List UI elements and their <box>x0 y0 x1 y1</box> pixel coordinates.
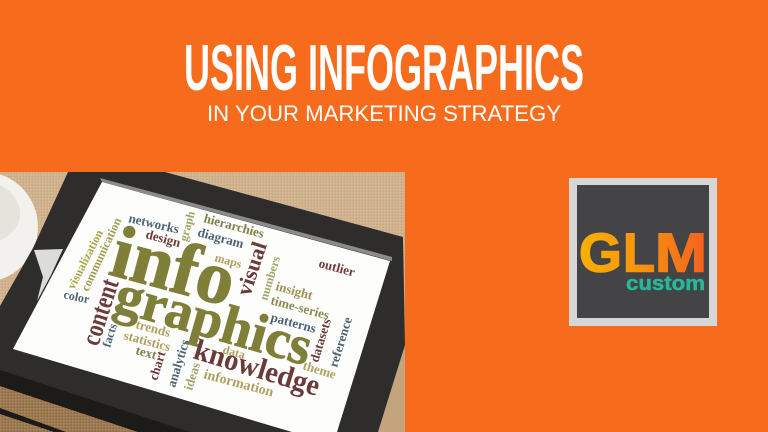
word: information: information <box>202 367 275 400</box>
word: time-series: time-series <box>269 292 331 322</box>
word: graph: graph <box>176 209 198 243</box>
coffee cup <box>0 172 38 282</box>
word: patterns: patterns <box>269 309 318 336</box>
word: analytics: analytics <box>164 338 192 389</box>
home button recess <box>34 249 63 301</box>
word: networks: networks <box>127 210 181 236</box>
word cloud <box>62 209 357 403</box>
word: graphics: graphics <box>109 263 319 377</box>
logo: GLM custom <box>569 178 717 326</box>
tablet frame <box>0 172 405 432</box>
word: theme: theme <box>301 358 338 382</box>
darker burlap in shadow <box>0 386 138 432</box>
word: communication: communication <box>78 215 124 293</box>
word: text: text <box>134 342 159 362</box>
word: data: data <box>221 342 247 362</box>
word: statistics: statistics <box>122 327 172 354</box>
frame lower shadow band <box>0 370 190 432</box>
logo panel <box>577 185 709 318</box>
word: facts: facts <box>99 322 120 349</box>
word: outlier: outlier <box>317 255 357 279</box>
word: reference: reference <box>326 315 355 369</box>
logo wordmark GLM <box>579 222 707 284</box>
burlap table <box>0 172 405 432</box>
logo border <box>569 178 717 326</box>
word: visual: visual <box>231 238 272 299</box>
pen <box>0 408 66 432</box>
word: maps: maps <box>213 250 244 271</box>
logo wordmark GLM: M <box>655 222 707 284</box>
logo wordmark custom: custom <box>626 273 705 295</box>
word: design: design <box>144 226 183 250</box>
word: content: content <box>75 275 125 349</box>
cup inner shading <box>0 183 20 243</box>
photo: tablet with word cloud <box>0 172 405 432</box>
word: ideas: ideas <box>181 361 203 392</box>
logo wordmark GLM: L <box>623 222 655 284</box>
word: hierarchies: hierarchies <box>202 210 266 241</box>
subtitle: IN YOUR MARKETING STRATEGY <box>207 101 561 126</box>
tablet screen <box>13 182 390 432</box>
word: color: color <box>62 287 91 306</box>
word: chart: chart <box>146 349 169 382</box>
word: knowledge: knowledge <box>190 333 324 403</box>
word: insight: insight <box>274 278 315 303</box>
word: info: info <box>103 210 245 323</box>
logo wordmark GLM: G <box>579 222 622 284</box>
word: numbers: numbers <box>256 254 283 302</box>
word: trends: trends <box>134 316 172 340</box>
tablet screen bezel line <box>100 178 392 261</box>
word: diagram: diagram <box>196 224 246 251</box>
right burlap in shadow <box>378 345 405 432</box>
word: datasets: datasets <box>307 317 334 364</box>
word: visualization: visualization <box>64 227 106 291</box>
